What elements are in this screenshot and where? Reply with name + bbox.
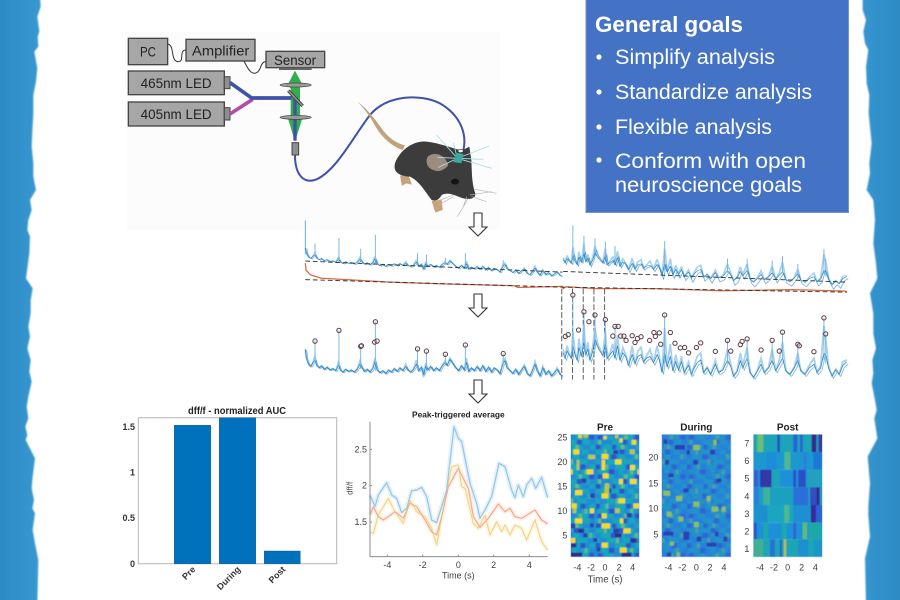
heatmap: During: -4: [664, 562, 672, 572]
line chart title: Peak-triggered average: [412, 410, 505, 420]
heatmap: Pre: 25: [557, 433, 567, 443]
panel: fiber photometry setup diagram: [127, 32, 500, 230]
PC box: [128, 38, 168, 65]
465nm LED box: 465nm LED: [141, 75, 212, 91]
heatmap: Post: 5: [744, 474, 749, 484]
ferrule: [292, 143, 299, 155]
heatmap: During: 2: [707, 562, 712, 572]
detected peak markers: [313, 293, 828, 356]
axis tick labels and axis titles: [345, 444, 532, 581]
arrow: peak detection to summary plots: [469, 380, 487, 403]
heatmap: Post: 4: [813, 562, 818, 572]
Amplifier box: [186, 39, 255, 61]
axis tick labels and axis titles: Time (s): [442, 571, 475, 581]
heatmap: Post: -2: [770, 562, 778, 572]
heatmap: During: 5: [653, 529, 658, 539]
arrow: raw traces to peak detection: [469, 294, 487, 317]
left torn blue side strip: [0, 0, 41, 600]
axis tick labels and axis titles: -2: [419, 560, 427, 570]
category labels: [180, 564, 287, 592]
plot frame: [138, 418, 337, 564]
line chart: peak-triggered average: [345, 410, 548, 581]
category labels: Pre: [180, 564, 197, 582]
heatmap: Post: 7: [744, 438, 749, 448]
dashed baseline fits: [305, 261, 847, 292]
category labels: Post: [267, 564, 287, 585]
axes: [370, 422, 548, 557]
bullet list: [596, 46, 812, 197]
PC box: PC: [140, 44, 156, 60]
bullet list: Standardize analysis: [615, 81, 812, 104]
axis tick labels and axis titles: 4: [527, 560, 532, 570]
heatmap: During: During: [680, 422, 712, 433]
bullet list: Simplify analysis: [615, 46, 775, 69]
heatmap: During: 0: [694, 562, 699, 572]
heatmap: Post: [744, 422, 826, 572]
orange 405nm isosbestic trace: [305, 263, 846, 291]
axis tick labels and axis titles: -4: [383, 560, 391, 570]
heatmap: Post: -4: [756, 562, 764, 572]
heatmap: Post: 4: [744, 491, 749, 501]
trace segment during and after event: [563, 295, 847, 378]
bar chart title: dff/f - normalized AUC: [188, 406, 286, 417]
y-axis labels: [122, 422, 135, 569]
y-axis labels: 0: [130, 559, 135, 569]
heatmap: During: [648, 422, 733, 572]
heatmap: Pre: 5: [562, 531, 567, 541]
chart: dF/F trace with detected peaks and event markers: [305, 289, 848, 380]
panel: peak heatmaps: [557, 422, 826, 586]
dichroic mirror: [288, 91, 303, 106]
panel: General goals box: [586, 0, 848, 212]
heatmap: Post: 6: [744, 456, 749, 466]
heatmap: Post: Post: [777, 422, 799, 433]
bullet list: Flexible analysis: [615, 116, 772, 139]
bars: [174, 418, 300, 564]
heatmap: Pre: [557, 422, 642, 586]
excitation fibers from LEDs: [230, 83, 292, 114]
axis tick labels and axis titles: 0: [456, 560, 461, 570]
heatmap: Pre: 20: [557, 457, 567, 467]
heatmap: During: -2: [678, 562, 686, 572]
heatmap: Post: 0: [785, 562, 790, 572]
Amplifier box: Amplifier: [192, 43, 250, 59]
trace segment before event: [305, 322, 562, 377]
right torn blue side strip: [863, 0, 900, 600]
trace overlay: extra noise density: [307, 341, 848, 379]
heatmap: Pre: Time (s): [587, 575, 623, 586]
axis tick labels and axis titles: 2: [491, 560, 496, 570]
axis tick labels and axis titles: 1.5: [354, 517, 367, 527]
y-axis labels: 1.5: [122, 422, 135, 432]
category labels: During: [215, 564, 242, 592]
heatmap: During: 20: [648, 453, 658, 463]
heatmap: Pre: 2: [616, 562, 621, 572]
optics: filter cube, lenses, green light: [280, 71, 311, 142]
heatmap: During: 4: [721, 562, 726, 572]
bar chart: dff/f normalized AUC: [122, 406, 337, 592]
mouse illustration: [357, 102, 497, 217]
heatmap: Pre: 15: [557, 482, 567, 492]
405nm LED box: [128, 102, 230, 126]
heading: General goals: General goals: [595, 12, 743, 37]
heatmap: Pre: 0: [602, 562, 607, 572]
heatmap: Pre: -4: [573, 562, 581, 572]
y-axis labels: 0.5: [122, 513, 135, 523]
bullet list: Conform with open: [615, 150, 806, 173]
error bands: [370, 427, 548, 550]
heatmap: Pre: 10: [557, 506, 567, 516]
heatmap: Post: 3: [744, 509, 749, 519]
blue 465nm signal trace: [305, 220, 848, 291]
mean curves: [370, 427, 548, 550]
event marker dashed lines: [562, 289, 605, 380]
465nm LED box: [128, 71, 230, 95]
patch cord fiber to mouse: [295, 97, 464, 181]
cables between PC, amplifier and sensor: [168, 44, 266, 73]
heatmap: Post: 1: [744, 544, 749, 554]
Sensor box: Sensor: [274, 52, 316, 68]
axis tick labels and axis titles: dff/f: [345, 481, 354, 495]
chart: raw signal traces with fitted baselines: [305, 220, 848, 292]
Sensor box: [266, 51, 325, 70]
heatmap: Pre: -2: [587, 562, 595, 572]
heatmap: Pre: 4: [630, 562, 635, 572]
axis tick labels and axis titles: 2: [362, 481, 367, 491]
heatmap: Post: 2: [744, 527, 749, 537]
heatmap: During: 15: [648, 478, 658, 488]
heatmap: Post: 2: [799, 562, 804, 572]
heatmap: During: 10: [648, 504, 658, 514]
bullet list: neuroscience goals: [615, 174, 802, 197]
heatmap: Pre: Pre: [597, 422, 613, 433]
405nm LED box: 405nm LED: [141, 106, 212, 122]
y-axis labels: 1: [130, 468, 135, 478]
arrow: setup to raw traces: [469, 213, 487, 236]
axis tick labels and axis titles: 2.5: [354, 444, 367, 454]
